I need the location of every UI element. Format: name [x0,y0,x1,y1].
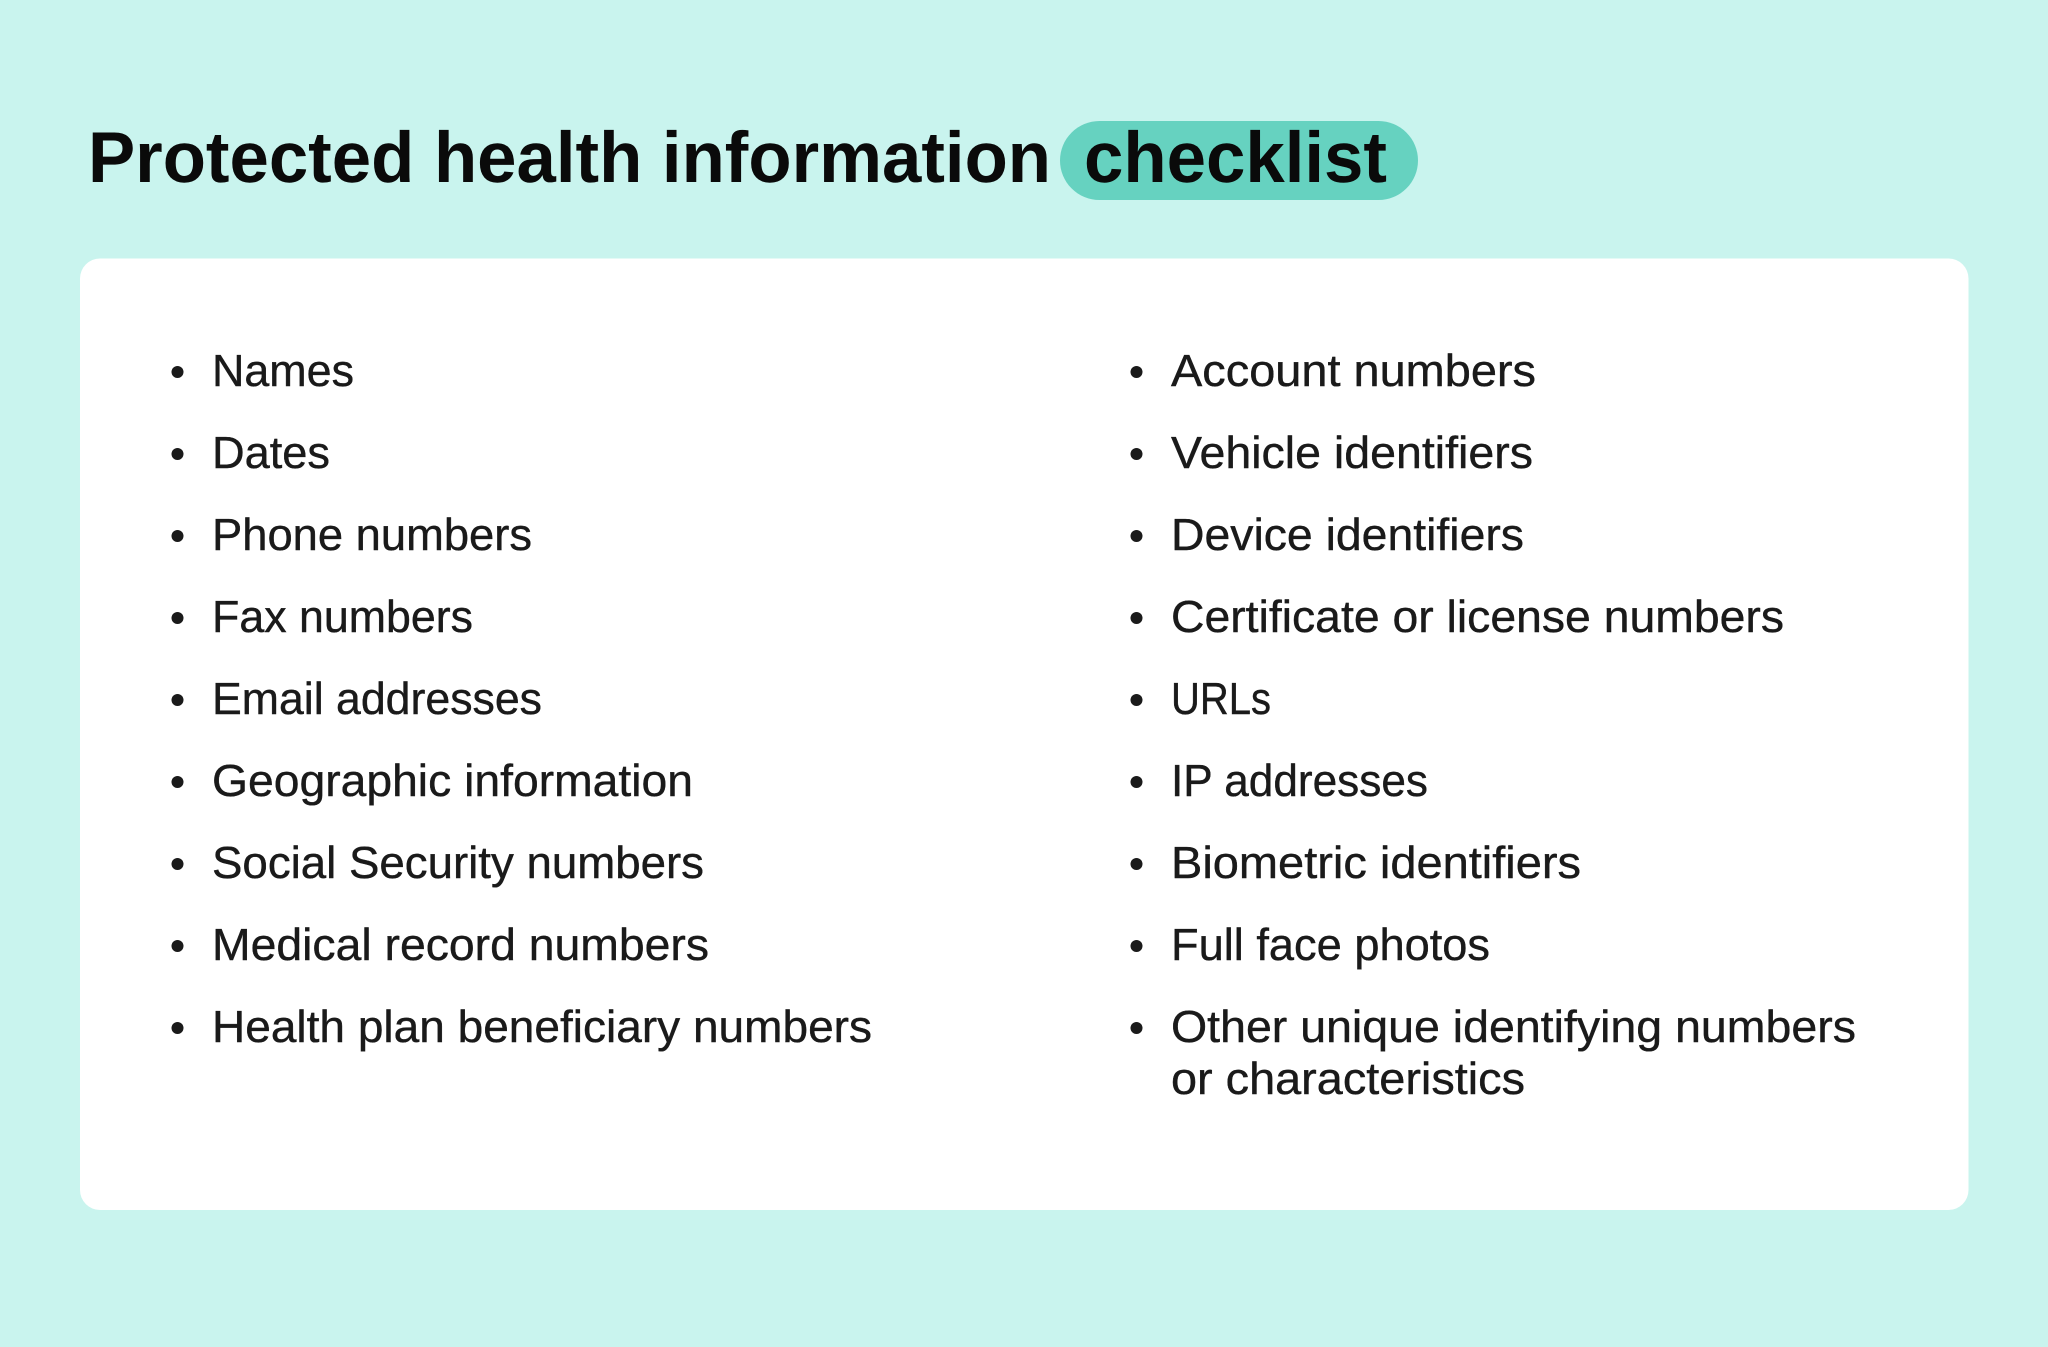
item: Health plan beneficiary numbers: Health plan beneficiary numbers [212,1001,872,1052]
item: Dates: Dates [212,427,330,478]
item: Vehicle identifiers: Vehicle identifiers [1171,427,1533,478]
item: Names: Names [212,345,354,396]
card background [80,258,1968,1210]
item: URLs: URLs [1171,673,1271,724]
item: Fax numbers: Fax numbers [212,591,473,642]
item: Certificate or license numbers: Certificate or license numbers [1171,591,1784,642]
item: Full face photos: Full face photos [1171,919,1490,970]
item: Geographic information: Geographic information [212,755,693,806]
highlighted word: checklist [1060,118,1418,200]
item: Social Security numbers: Social Security numbers [212,837,704,888]
right column list [1130,345,1856,1104]
item: Other unique identifying numbers or characteristics [1130,1001,1856,1104]
item: IP addresses: IP addresses [1171,755,1428,806]
item: Medical record numbers: Medical record numbers [212,919,709,970]
item: Device identifiers: Device identifiers [1171,509,1524,560]
item: Email addresses: Email addresses [212,673,542,724]
item: Phone numbers: Phone numbers [212,509,532,560]
highlight text: checklist [1084,118,1387,198]
item: Other unique identifying numbers or characteristics: or characteristics [1171,1053,1525,1104]
panel: checklist card [80,258,1968,1210]
item: URLs [1130,673,1271,724]
title text: Protected health information [88,118,1051,198]
item: Other unique identifying numbers or characteristics: Other unique identifying numbers [1171,1001,1856,1052]
highlight pill [1060,121,1418,200]
item: Account numbers: Account numbers [1171,345,1536,396]
item: Biometric identifiers: Biometric identifiers [1171,837,1581,888]
title [88,118,1418,200]
left column list [172,345,872,1052]
